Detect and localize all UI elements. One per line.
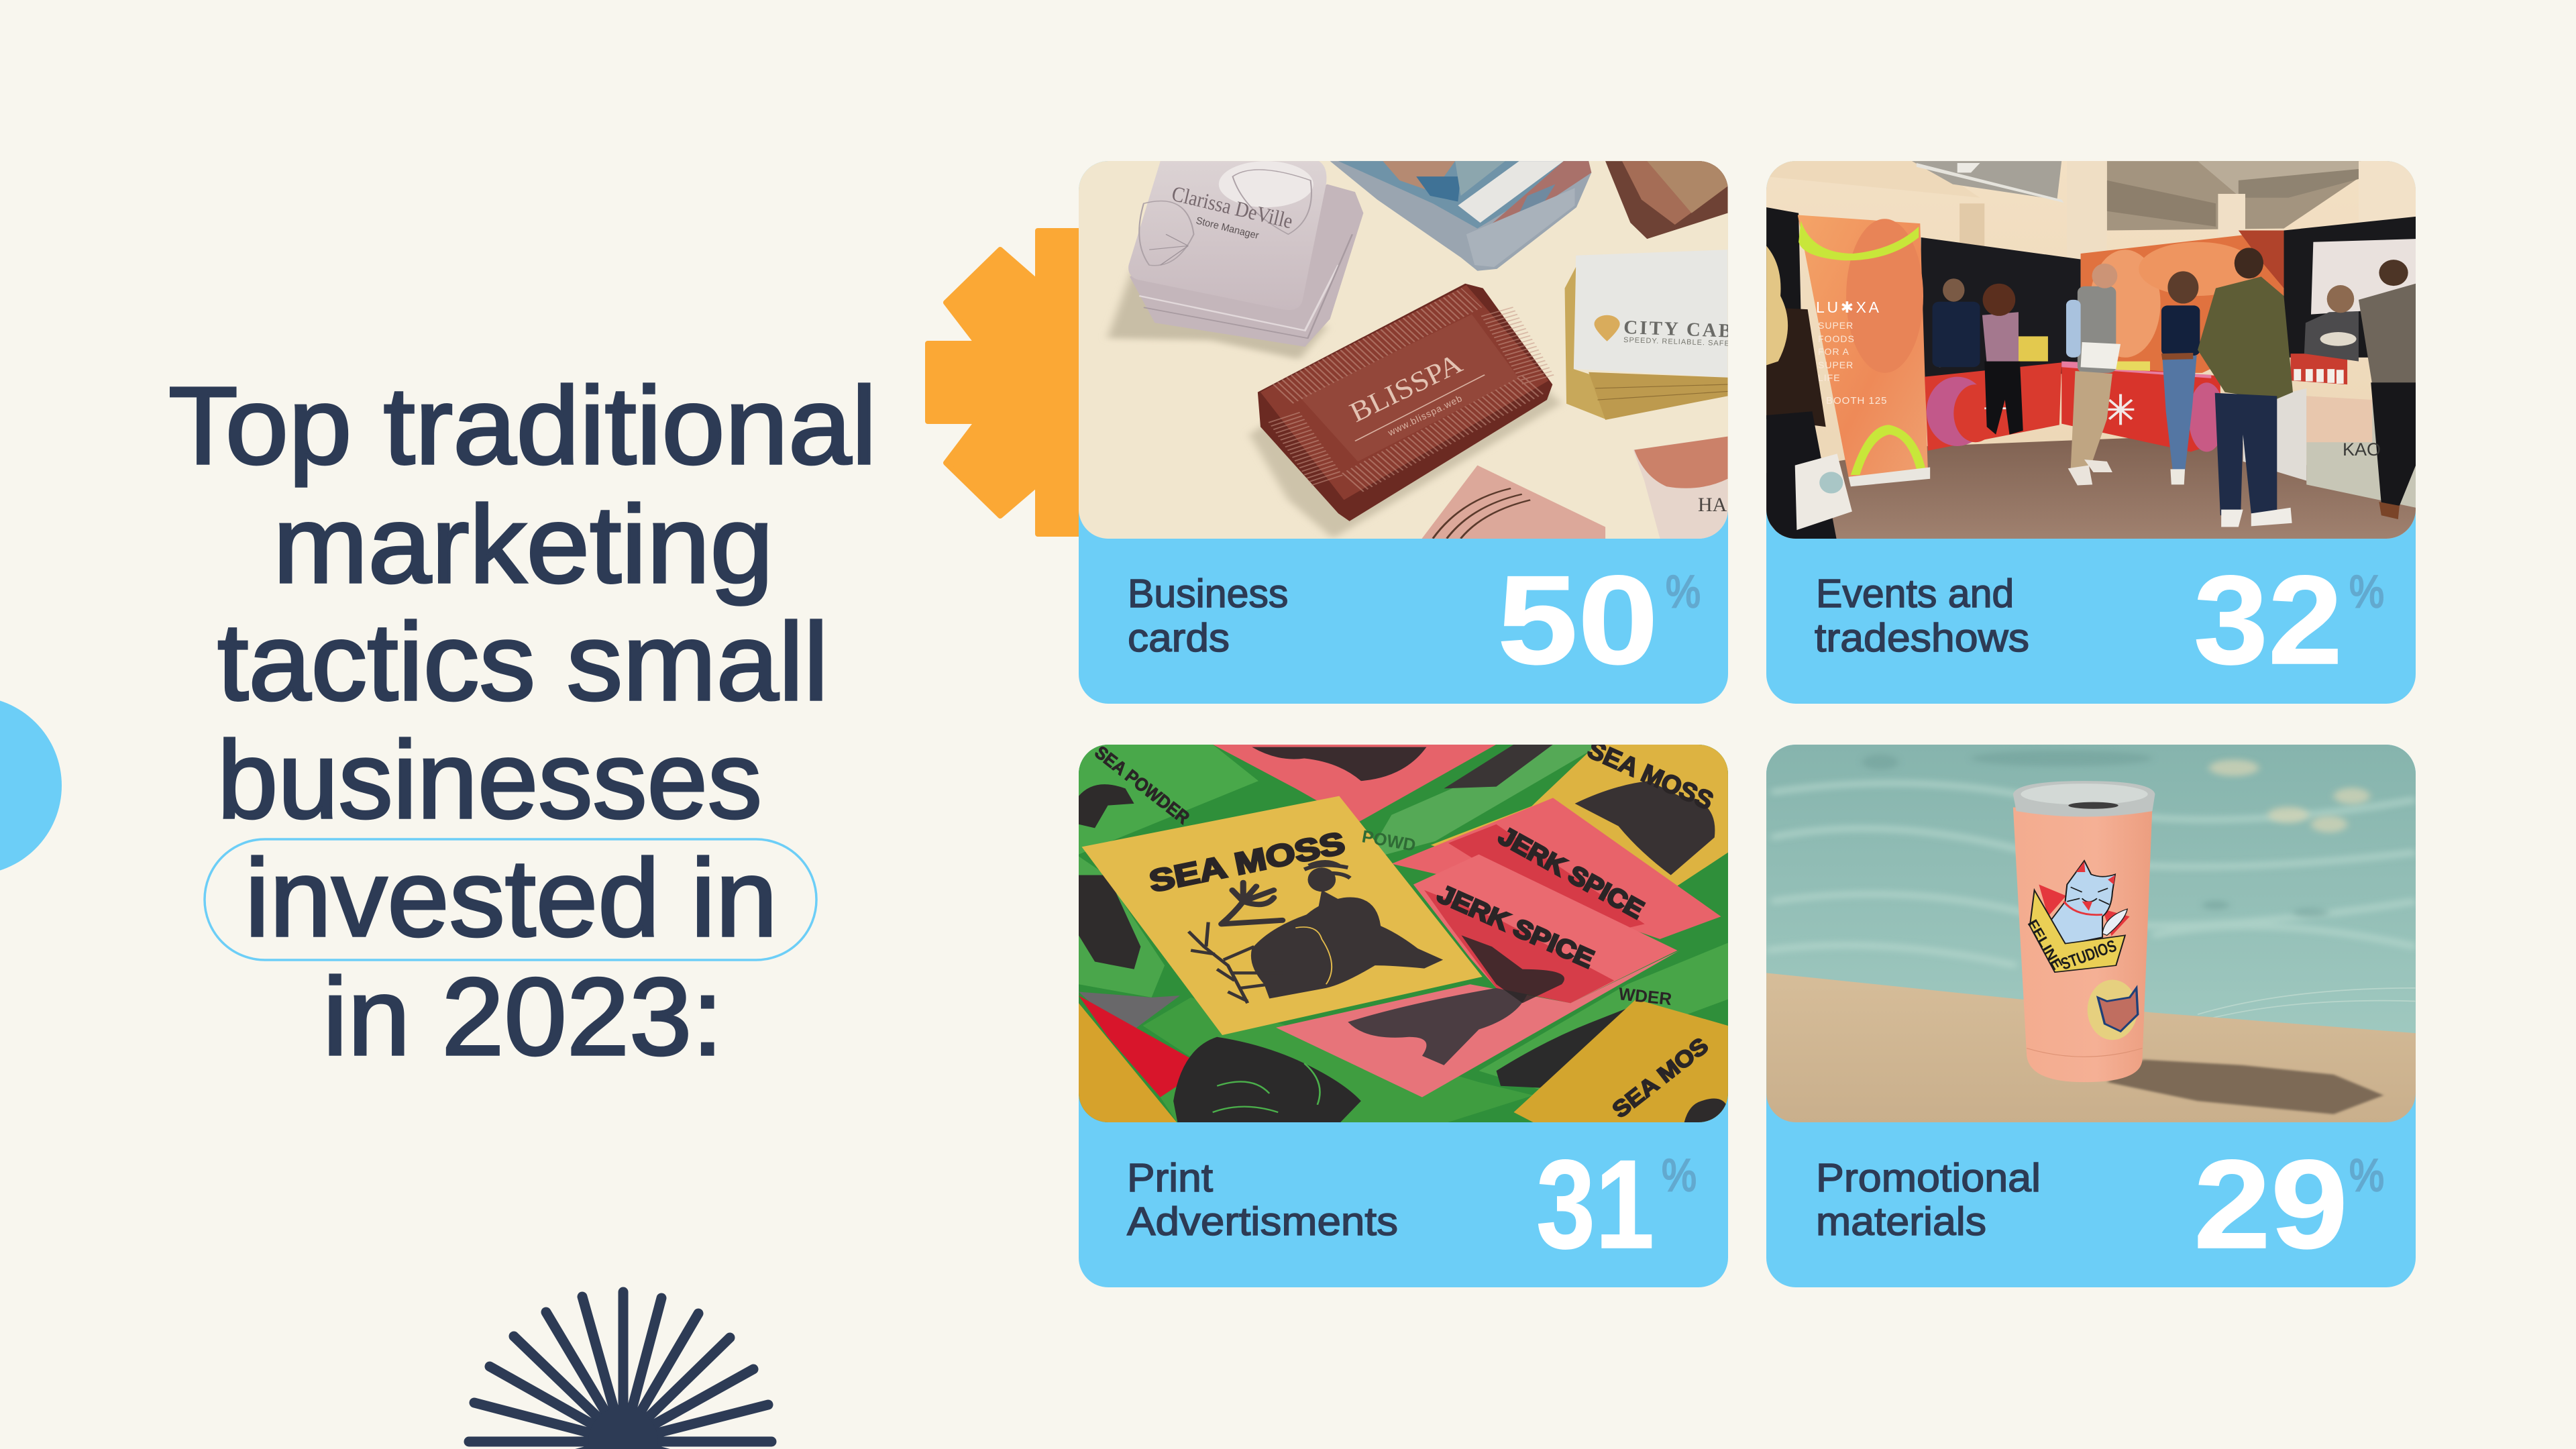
label: events and tradeshows	[1815, 572, 2029, 660]
label: events and tradeshows: tradeshows	[1815, 616, 2029, 660]
heading: Top traditional	[168, 364, 877, 487]
text in photo: card names	[1169, 181, 1734, 516]
text in photo: packet labels: WDER	[1617, 983, 1673, 1009]
text in photo: packet labels	[1091, 735, 1717, 1123]
text in photo: booth signage: SUPER	[1818, 360, 1854, 370]
label: business cards: Business	[1128, 572, 1288, 616]
icon: orange starburst	[928, 231, 1081, 534]
label: promotional materials: Promotional	[1816, 1156, 2041, 1200]
text in photo: card names: CITY CAB	[1623, 317, 1734, 342]
heading: tactics small	[217, 600, 828, 723]
label: print advertisments: Advertisments	[1127, 1199, 1398, 1244]
text in photo: sticker: STUDIOS	[2058, 936, 2119, 974]
heading: invested in	[245, 837, 777, 959]
heading: businesses	[217, 718, 762, 841]
text in photo: booth signage: KAO	[2343, 439, 2381, 460]
text in photo: booth signage: BOOTH 125	[1826, 395, 1888, 407]
value: 32 percent: %	[2349, 566, 2384, 617]
text in photo: booth signage: FOR A	[1818, 346, 1849, 357]
icon: navy sunburst	[469, 1292, 771, 1449]
card background: business cards	[1079, 161, 1728, 704]
label: print advertisments: Print	[1127, 1156, 1213, 1200]
text in photo: sticker: FELINE	[2025, 917, 2065, 973]
text in photo: packet labels: SEA MOSS	[1146, 825, 1348, 899]
label: promotional materials: materials	[1816, 1199, 1986, 1244]
value: 31 percent: 31	[1536, 1134, 1654, 1275]
value: 32 percent: 32	[2194, 549, 2343, 690]
value: 31 percent: %	[1662, 1150, 1697, 1201]
panel: promotional materials	[1762, 743, 2420, 1287]
label: business cards	[1128, 572, 1288, 660]
text in photo: card names: HA	[1698, 494, 1727, 516]
text in photo: packet labels: JERK SPICE	[1433, 880, 1598, 974]
text in photo: booth signage: SUPER	[1818, 320, 1854, 331]
text in photo: packet labels: SEA POWDER	[1091, 742, 1193, 828]
value: 29 percent: 29	[2194, 1134, 2348, 1275]
label: events and tradeshows: Events and	[1816, 572, 2014, 616]
photo: business cards	[1079, 161, 1734, 542]
text in photo: packet labels: SEA MOSS	[1583, 735, 1717, 816]
text in photo: booth signage: LU✱XA	[1816, 299, 1880, 316]
text in photo: card names: Store Manager	[1195, 215, 1260, 241]
text in photo: booth signage: LIFE	[1818, 372, 1841, 383]
card background: events	[1766, 161, 2416, 704]
text in photo: packet labels: POWD	[1360, 826, 1417, 855]
photo: tumbler by pool	[1762, 743, 2420, 1124]
text in photo: card names: Clarissa DeVille	[1169, 181, 1295, 233]
label: business cards: cards	[1128, 616, 1230, 660]
text in photo: card names: SPEEDY. RELIABLE. SAFE.	[1623, 336, 1733, 348]
decorative blue half circle	[0, 696, 62, 875]
label: print advertisments	[1127, 1156, 1398, 1244]
photo: tradeshow booth	[1762, 157, 2420, 542]
heading: in 2023:	[323, 955, 723, 1078]
text in photo: card names: www.blisspa.web	[1385, 392, 1464, 438]
text in photo: booth signage: FOODS	[1818, 333, 1855, 344]
card background: promotional	[1766, 745, 2416, 1287]
label: promotional materials	[1816, 1156, 2041, 1244]
text in photo: booth signage	[1816, 299, 2381, 460]
text in photo: card names: BLISSPA	[1345, 347, 1468, 429]
value: 50 percent	[1497, 549, 1701, 690]
panel: events and tradeshows	[1762, 157, 2420, 704]
value: 50 percent: %	[1666, 566, 1701, 617]
value: 50 percent: 50	[1497, 549, 1658, 690]
heading	[168, 364, 877, 1078]
panel: business cards	[1079, 161, 1734, 704]
photo: printed packets	[1077, 735, 1732, 1124]
text in photo: packet labels: SEA MOS	[1608, 1033, 1713, 1123]
text in photo: packet labels: JERK SPICE	[1494, 822, 1648, 924]
value: 29 percent: %	[2349, 1150, 2384, 1201]
card background: print	[1079, 745, 1728, 1287]
highlight pill around invested in	[205, 839, 816, 960]
text in photo: sticker	[2027, 919, 2116, 970]
panel: print advertisments	[1077, 735, 1732, 1287]
heading: marketing	[273, 483, 773, 606]
